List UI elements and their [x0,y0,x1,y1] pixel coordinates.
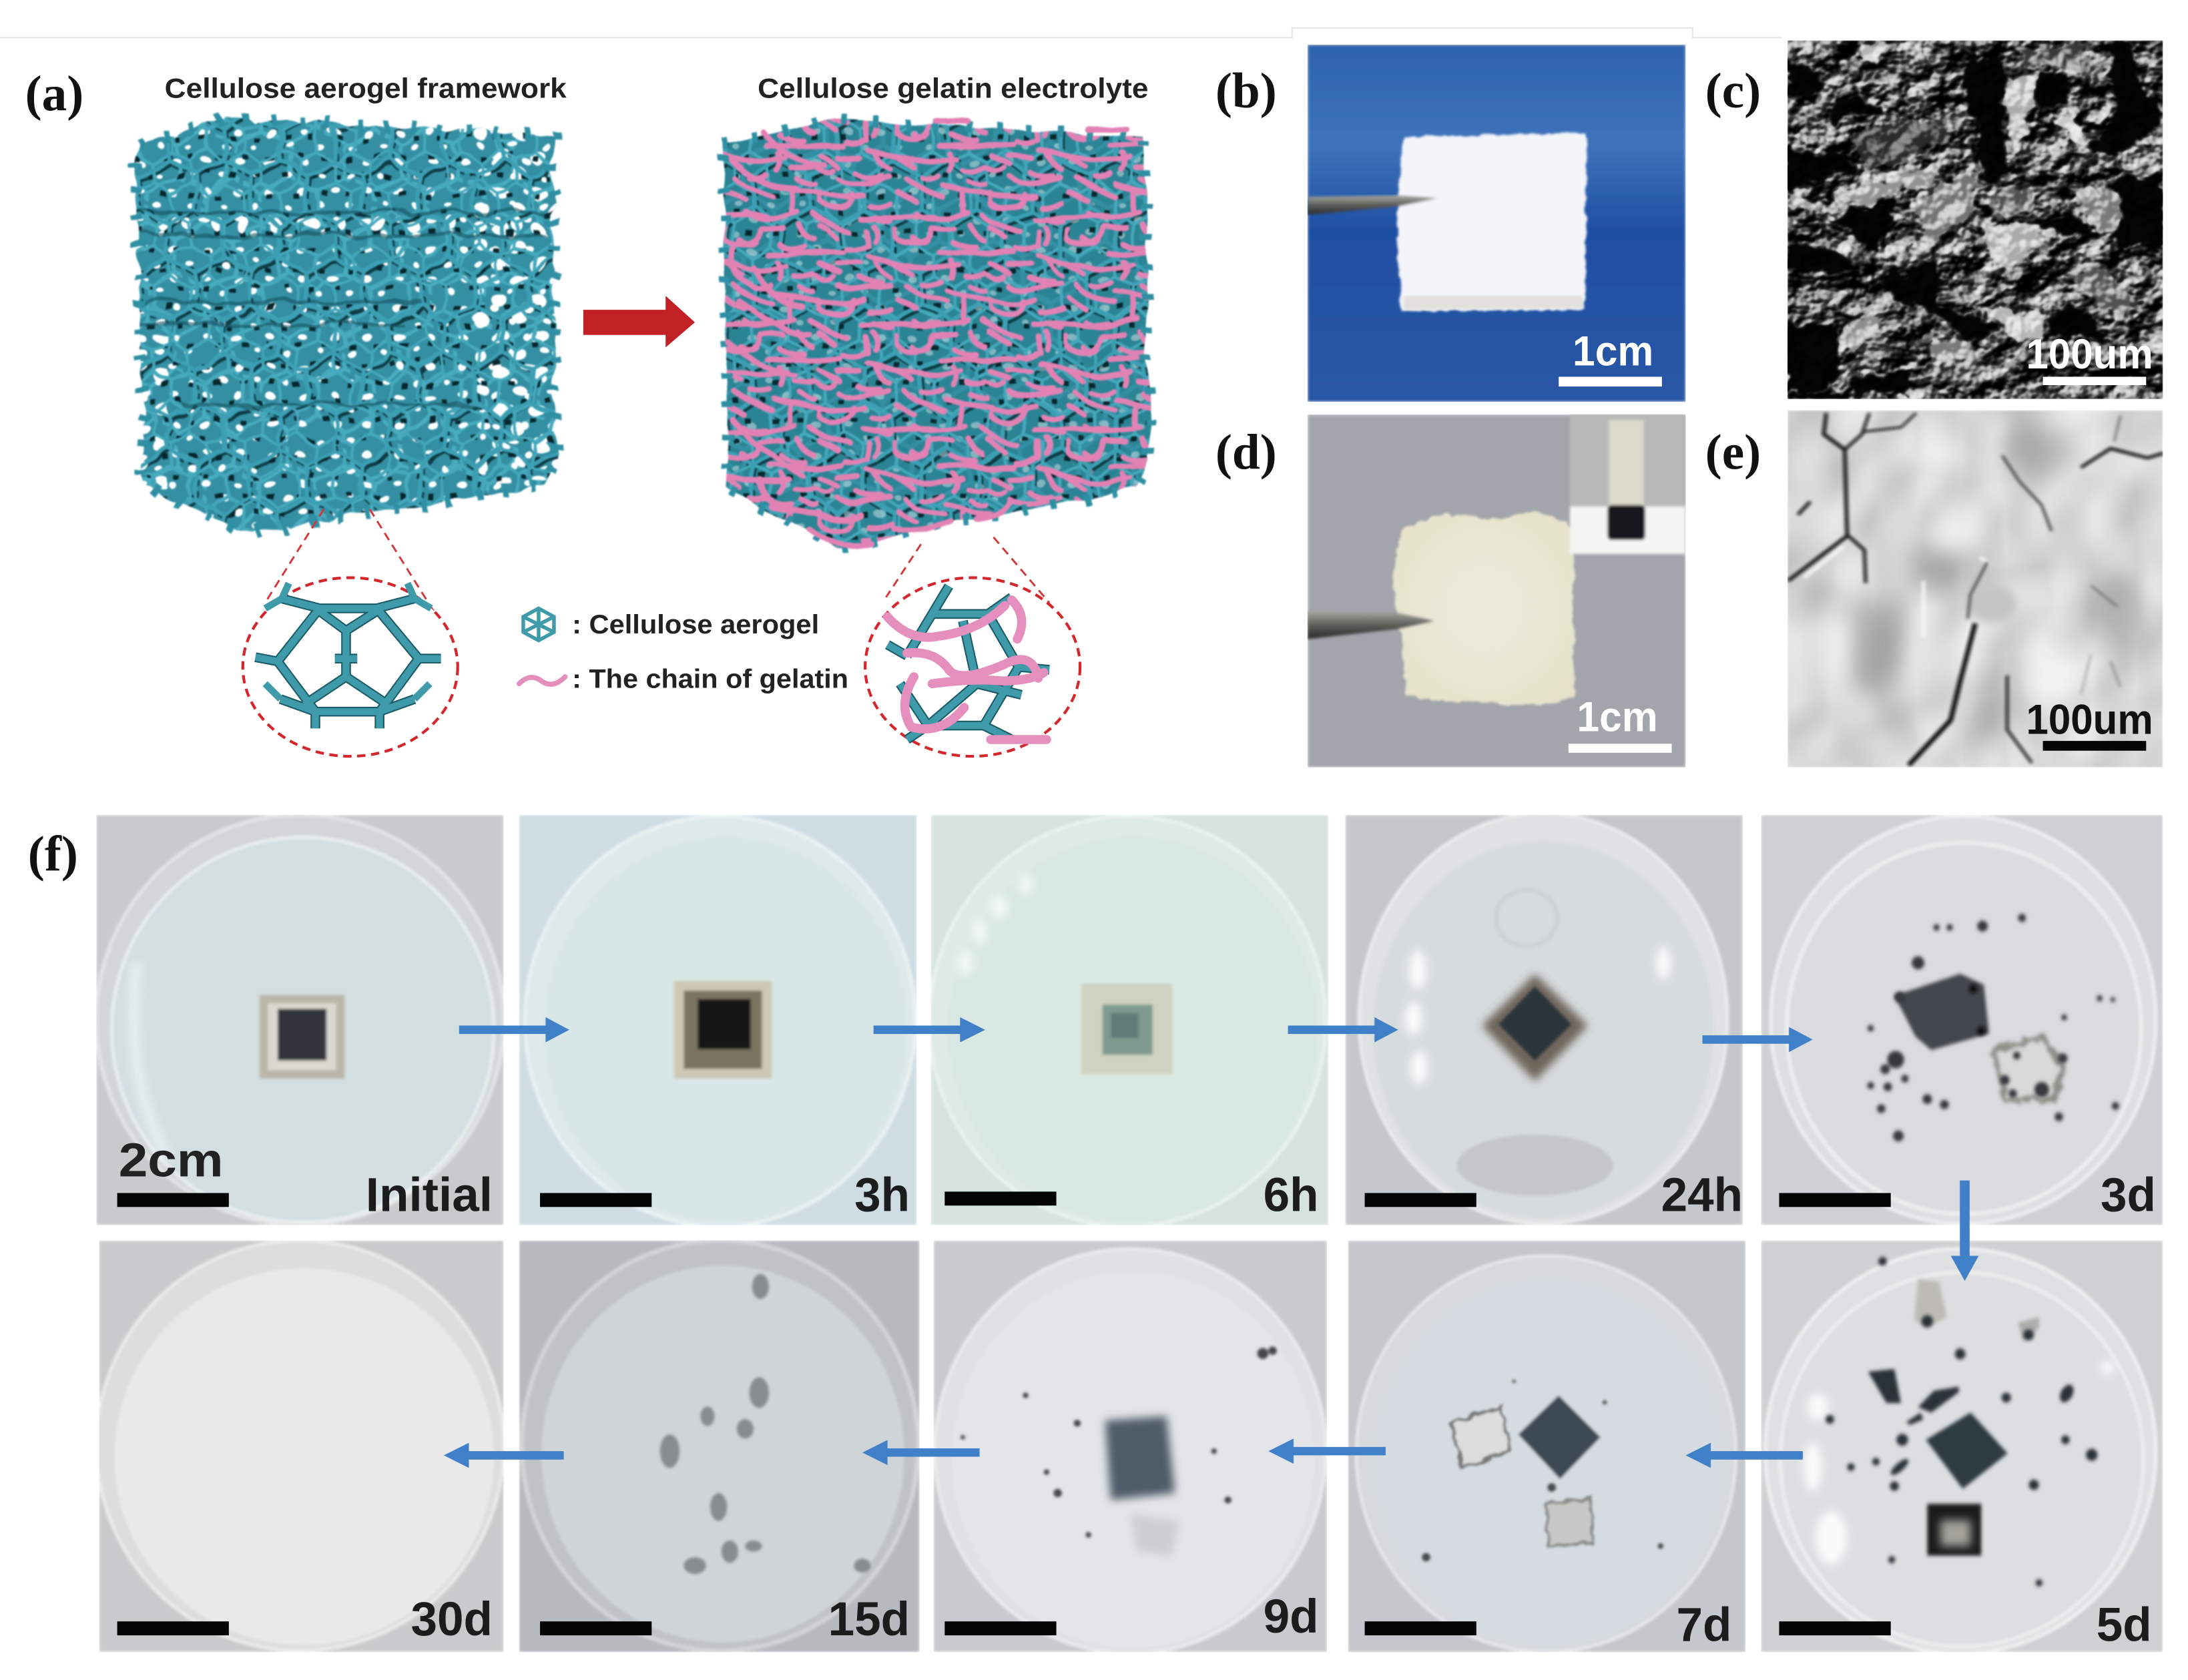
time label: 6h [1264,1169,1319,1222]
legend: cellulose aerogel: : Cellulose aerogel [572,610,819,639]
fragments [1451,1406,1593,1546]
label (b): (b) [1215,63,1277,119]
time label: 5d [2097,1599,2152,1651]
scale text: 1cm [1577,693,1658,740]
samples and debris [1804,1257,2114,1587]
scale bar [1569,744,1671,753]
lattice block: cellulose gelatin electrolyte [712,111,1158,558]
highlight [959,875,1033,975]
arrow: 7d to 9d [1268,1438,1386,1464]
scale bar [2043,376,2146,385]
arrow: 24h to 3d [1702,1027,1813,1052]
dish: 3h [519,815,916,1227]
arrow: 6h to 24h [1288,1017,1398,1043]
callout: dashed zoom lines [265,509,1049,614]
time label: 15d [828,1593,910,1646]
callout: aerogel close-up [243,577,458,756]
scale bar [1365,1621,1476,1635]
highlight [133,962,168,1158]
lattice block: cellulose aerogel [125,111,565,544]
scale bar [117,1193,229,1207]
panel: (f) degradation time series [28,814,2163,1653]
time label: 24h [1661,1169,1743,1222]
photo: gel block on grey [1308,414,1685,768]
scale bar [1779,1193,1891,1207]
arrow: 3h to 6h [874,1017,985,1043]
time label: 30d [411,1593,493,1646]
SEM micrograph: smooth gel surface [1788,410,2163,768]
scale bar [1559,376,1662,386]
panel: (e) SEM image of gel [1705,410,2163,768]
sample halo [1482,974,1588,1081]
scale text: 1cm [1573,328,1653,375]
label (e): (e) [1705,425,1761,480]
dish: 6h [929,815,1328,1227]
heading: cellulose gelatin electrolyte: Cellulose gelatin electrolyte [758,72,1149,103]
dish: 24h [1345,814,1743,1225]
photo: white cellulose aerogel on blue [1308,45,1685,402]
scale bar [540,1193,651,1207]
arrow: 3d to 5d [1951,1181,1978,1281]
panel: (b) dry aerogel photo [1215,45,1685,402]
debris [961,1346,1277,1538]
arrow: 9d to 15d [862,1440,980,1465]
sample [1498,987,1571,1061]
scale bar [944,1191,1057,1205]
sample [1105,1416,1179,1556]
label (c): (c) [1705,63,1761,119]
legend: chain of gelatin: : The chain of gelatin [572,665,848,694]
arrow: 5d to 7d [1685,1443,1803,1468]
label (f): (f) [28,826,78,882]
panel: (c) SEM image of aerogel [1705,41,2165,399]
dish: 7d [1348,1240,1745,1652]
samples and debris [1867,914,2119,1141]
arrow: Initial to 3h [459,1017,569,1043]
scale text: 100um [2026,331,2153,378]
callout: gelatin close-up [865,577,1080,756]
label (a): (a) [25,66,83,121]
scale bar [1779,1621,1891,1635]
arrow: red process arrow [583,296,695,348]
panel: (d) gel electrolyte photo [1215,414,1685,768]
dish: 15d [519,1240,920,1652]
inset: vial photo [1570,414,1685,554]
time label: 3h [854,1169,910,1222]
dish: 30d [96,1240,504,1652]
dish: 3d [1761,815,2163,1225]
panel: (a) cellulose structures [25,66,1158,756]
SEM micrograph: porous aerogel [1786,41,2165,399]
residue [660,1274,871,1574]
label (d): (d) [1215,425,1277,480]
time label: Initial [366,1169,493,1222]
time label: 7d [1676,1599,1731,1651]
dish: 9d [934,1240,1327,1653]
scale bar [1365,1193,1476,1207]
scale bar [540,1621,651,1635]
scale bar [117,1621,229,1635]
scale text: 100um [2026,697,2153,744]
scale text: 2cm [119,1134,223,1187]
debris [1422,1380,1663,1561]
dish: 5d [1761,1240,2163,1653]
scale bar [944,1621,1057,1635]
time label: 3d [2101,1169,2156,1222]
scale bar [2043,741,2146,751]
arrow: 15d to 30d [444,1443,564,1468]
highlight [1405,946,1670,1084]
time label: 9d [1264,1591,1319,1643]
heading: cellulose aerogel framework: Cellulose aerogel framework [165,72,567,103]
dish: Initial [96,815,504,1225]
